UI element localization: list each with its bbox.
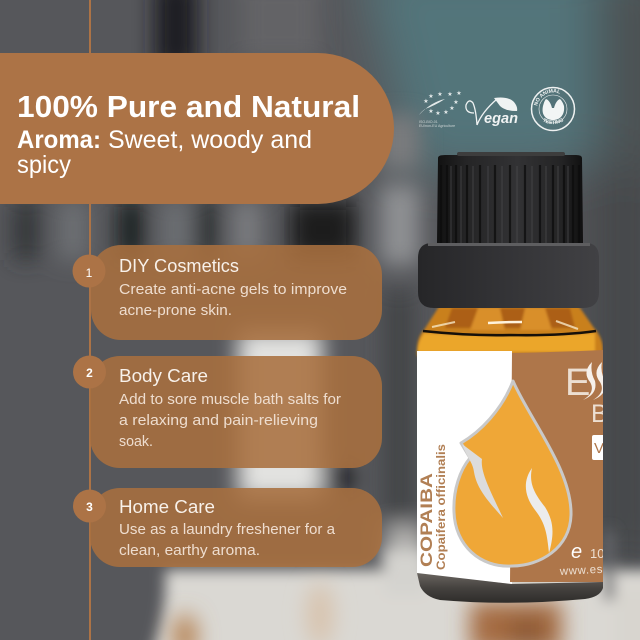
card 3 text: Use as a laundry freshener for a [119, 522, 336, 538]
vertical timeline line [89, 0, 91, 640]
aroma description: Aroma: [17, 126, 101, 154]
aroma description: spicy [17, 151, 71, 179]
badge 1 [72, 254, 106, 288]
card 1 text: acne-prone skin. [119, 303, 232, 319]
brand text on label [560, 362, 603, 575]
icon: EU organic leaf: ★ [453, 99, 459, 106]
icon: EU organic leaf: ISO-BIO-01 [419, 120, 438, 124]
botanical name rotated: Copaifera officinalis [434, 444, 448, 570]
card 2 text: a relaxing and pain-relieving [119, 413, 318, 429]
title: 100% Pure and Natural [17, 89, 360, 124]
oil drop emblem [454, 381, 571, 566]
icon: no animal testing badge [530, 86, 576, 132]
icon: no animal testing badge: NO ANIMAL [534, 88, 560, 106]
icon: Vegan logo [466, 98, 518, 127]
brand text on label: e [571, 541, 582, 563]
icon: EU organic leaf: ★ [428, 108, 434, 115]
badge 2 [73, 356, 106, 388]
brand text on label: www.es [559, 564, 603, 578]
card 3 text: clean, earthy aroma. [119, 543, 260, 559]
icon: EU organic leaf: ★ [449, 105, 455, 112]
bottle base [417, 573, 603, 603]
card 3 text [119, 522, 336, 559]
card 1 heading: DIY Cosmetics [119, 256, 239, 276]
icon: EU organic leaf: ★ [423, 98, 429, 105]
badge 1: 1 [86, 266, 93, 280]
brand text on label: B [591, 400, 608, 428]
icon: EU organic leaf: ★ [437, 91, 443, 98]
bottle [417, 152, 608, 603]
label: brown side [510, 350, 603, 582]
aroma description: Sweet, woody and [108, 126, 312, 154]
icon: EU organic leaf: ★ [443, 109, 449, 116]
bottle cap [418, 152, 599, 308]
panel: card 1 DIY Cosmetics [72, 245, 382, 340]
card 2 text: Add to sore muscle bath salts for [119, 392, 341, 408]
card 2 text: soak. [119, 434, 153, 450]
icon: EU organic leaf: EU/non-EU Agriculture [419, 124, 455, 128]
brand text on label: 10 [590, 546, 604, 561]
badge 2: 2 [86, 366, 93, 380]
card 1 text [119, 282, 347, 319]
icon: no animal testing badge: TESTING [544, 118, 564, 124]
icon: EU organic leaf: ★ [428, 93, 434, 100]
icon: EU organic leaf [419, 90, 462, 128]
card 1 text: Create anti-acne gels to improve [119, 282, 347, 298]
card 2 text [119, 392, 341, 450]
product name rotated: COPAIBA [418, 473, 436, 567]
icon: EU organic leaf: ★ [456, 90, 462, 97]
panel: header [0, 53, 394, 204]
aroma description [17, 126, 312, 179]
panel: card 2 Body Care [73, 356, 382, 468]
card 2 heading: Body Care [119, 366, 208, 386]
panel: card 3 Home Care [73, 488, 382, 567]
brand text on label: E [565, 362, 590, 404]
icon: Vegan logo: egan [484, 111, 518, 127]
icon: EU organic leaf: ★ [447, 91, 453, 98]
bottle neck and shoulder [417, 305, 603, 356]
card 3 heading: Home Care [119, 497, 215, 517]
brand text on label: V [594, 440, 604, 457]
badge 3 [73, 490, 106, 522]
badge 3: 3 [86, 500, 93, 514]
icon: EU organic leaf: ★ [435, 110, 441, 117]
label: white side [417, 351, 512, 584]
